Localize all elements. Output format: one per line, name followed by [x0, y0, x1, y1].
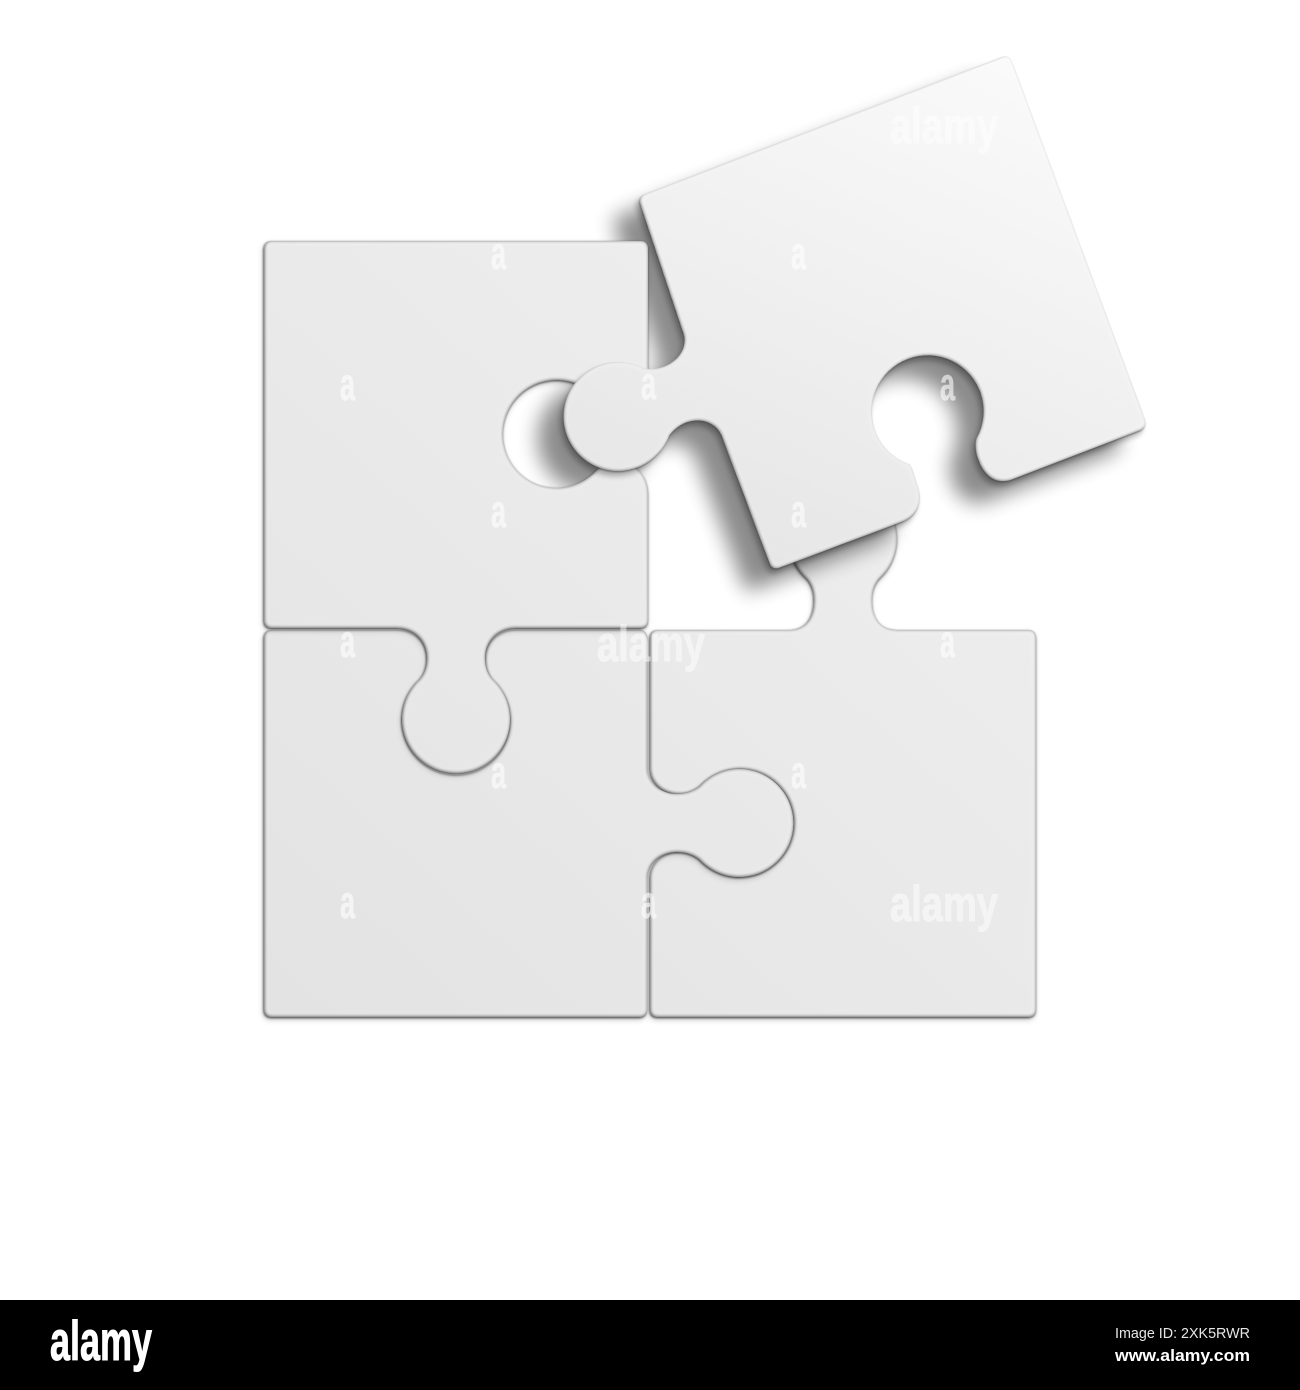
watermark: small a marks: a — [641, 357, 656, 409]
watermark: large alamy marks: alamy — [890, 98, 998, 154]
footer logo: alamy — [50, 1309, 152, 1372]
image id: Image ID: 2XK5RWR — [1115, 1325, 1250, 1342]
cast shadow of lifted piece — [470, 76, 1126, 645]
watermark: small a marks: a — [791, 746, 806, 798]
watermark: large alamy marks — [597, 98, 998, 932]
footer bar — [0, 1300, 1300, 1390]
watermark: small a marks: a — [641, 876, 656, 928]
puzzle piece: bottom left — [264, 630, 793, 1017]
watermark: small a marks: a — [491, 746, 506, 798]
tight contact shadow of lifted piece — [493, 59, 1149, 628]
watermark: small a marks: a — [791, 227, 806, 279]
watermark: small a marks: a — [340, 615, 355, 667]
watermark: small a marks: a — [491, 485, 506, 537]
watermark: large alamy marks: alamy — [597, 616, 705, 672]
watermark: small a marks: a — [940, 615, 955, 667]
watermark: small a marks: a — [491, 227, 506, 279]
watermark: small a marks: a — [940, 358, 955, 410]
watermark: large alamy marks: alamy — [890, 876, 998, 932]
watermark: small a marks: a — [340, 876, 355, 928]
watermark: small a marks: a — [340, 358, 355, 410]
puzzle piece: top left — [264, 241, 648, 773]
watermark: small a marks — [340, 227, 955, 928]
puzzle piece: lifted and rotated top right — [496, 54, 1152, 623]
website: www.alamy.com — [1114, 1346, 1250, 1365]
puzzle piece: bottom right — [650, 485, 1036, 1017]
watermark: small a marks: a — [791, 485, 806, 537]
